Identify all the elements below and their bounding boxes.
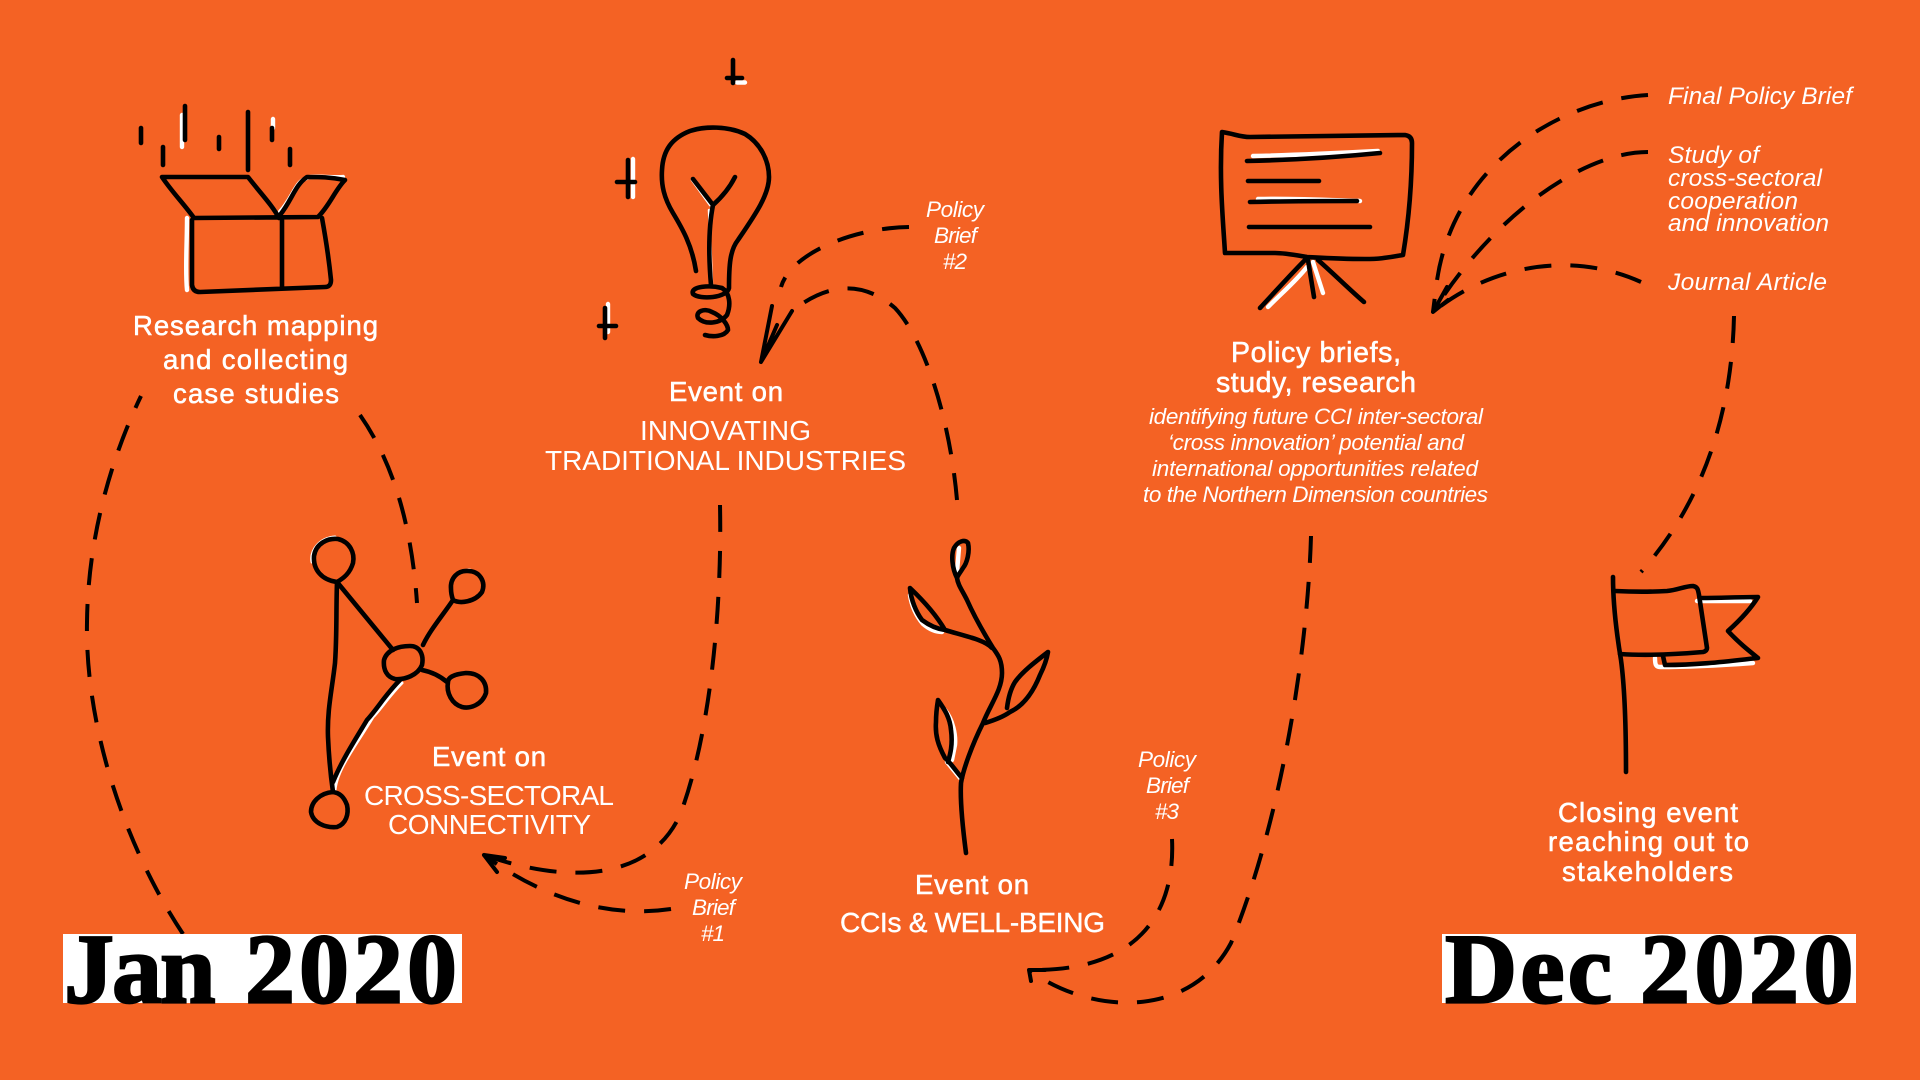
heading: closing event: stakeholders: [1562, 856, 1733, 887]
heading: innovating event: [545, 376, 906, 476]
dashed path: innovating event to cross-sectoral event: [484, 505, 720, 911]
start date label: [63, 914, 462, 1024]
heading: policy briefs: study, research: [1216, 367, 1416, 399]
list: research outputs: cooperation: [1668, 188, 1798, 215]
dashed path: presentation outputs to flag: [1641, 316, 1734, 572]
label: policy brief 1: #1: [701, 921, 725, 946]
dashed path: outputs to presentation board: [1433, 95, 1648, 312]
heading: cross-sectoral event: CONNECTIVITY: [388, 809, 591, 840]
list: research outputs: and innovation: [1668, 210, 1829, 237]
label: policy brief 2: [926, 197, 986, 274]
label: policy brief 3: Brief: [1146, 773, 1192, 798]
label: policy brief 2: Brief: [934, 223, 980, 248]
heading: cross-sectoral event: [364, 741, 614, 840]
heading: innovating event: Event on: [669, 376, 783, 407]
heading: closing event: [1548, 797, 1749, 887]
heading: CCIs event: [840, 869, 1105, 938]
icon: presentation board: [1221, 132, 1412, 308]
label: policy brief 2: #2: [943, 249, 967, 274]
heading: cross-sectoral event: CROSS-SECTORAL: [364, 780, 614, 811]
dashed path: plant event and policy brief 2 to innovating arrow: [761, 227, 957, 500]
list: research outputs: Journal Article: [1667, 269, 1827, 296]
start date label: 2020: [245, 914, 461, 1024]
heading: CCIs event: Event on: [915, 869, 1029, 900]
heading: CCIs event: CCIs & WELL-BEING: [840, 907, 1105, 938]
description: policy briefs: [1143, 404, 1488, 507]
icon: light bulb: [662, 128, 769, 336]
end date label: 2020: [1640, 914, 1858, 1024]
label: policy brief 3: #3: [1155, 799, 1179, 824]
heading: policy briefs: [1216, 337, 1416, 399]
heading: research mapping: Research mapping: [133, 310, 378, 341]
dashed path: policy briefs to CCIs event: [1029, 536, 1311, 1003]
heading: research mapping: case studies: [173, 378, 339, 409]
list: research outputs: cross-sectoral: [1668, 165, 1823, 192]
label: policy brief 1: [684, 869, 744, 946]
description: policy briefs: ‘cross innovation’ potential and: [1168, 430, 1465, 455]
panel: policy briefs, study, research: [1143, 132, 1488, 507]
heading: cross-sectoral event: Event on: [432, 741, 546, 772]
heading: policy briefs: Policy briefs,: [1231, 337, 1401, 369]
icon: flag: [1613, 577, 1758, 772]
panel: research mapping: [133, 106, 378, 409]
label: policy brief 2: Policy: [926, 197, 986, 222]
icon: network nodes: [311, 537, 486, 827]
heading: closing event: reaching out to: [1548, 826, 1749, 857]
icon: plant: [910, 541, 1048, 853]
panel: CCIs and well-being: [840, 541, 1105, 938]
label: policy brief 1: Brief: [692, 895, 738, 920]
end date label: [1442, 914, 1858, 1024]
start date label: Jan: [64, 914, 215, 1024]
description: policy briefs: to the Northern Dimension countries: [1143, 482, 1488, 507]
heading: innovating event: INNOVATING: [640, 415, 811, 446]
label: policy brief 3: Policy: [1138, 747, 1198, 772]
list: research outputs: [1667, 83, 1854, 296]
heading: research mapping: [133, 310, 378, 409]
icon: sparkle crosses: [599, 60, 745, 338]
list: research outputs: Study of: [1668, 142, 1761, 169]
dashed path: loop from January to research mapping: [87, 396, 417, 934]
label: policy brief 3: [1138, 747, 1198, 824]
label: policy brief 1: Policy: [684, 869, 744, 894]
panel: innovating traditional industries: [545, 60, 906, 476]
end date label: Dec: [1445, 914, 1615, 1024]
heading: closing event: Closing event: [1558, 797, 1738, 828]
icon: open box: [141, 106, 345, 292]
list: research outputs: Final Policy Brief: [1668, 83, 1854, 110]
description: policy briefs: international opportunities related: [1152, 456, 1479, 481]
panel: closing event: [1548, 577, 1758, 887]
panel: cross-sectoral connectivity: [311, 537, 614, 840]
heading: research mapping: and collecting: [163, 344, 348, 375]
description: policy briefs: identifying future CCI inter-sectoral: [1149, 404, 1484, 429]
heading: innovating event: TRADITIONAL INDUSTRIES: [545, 445, 906, 476]
